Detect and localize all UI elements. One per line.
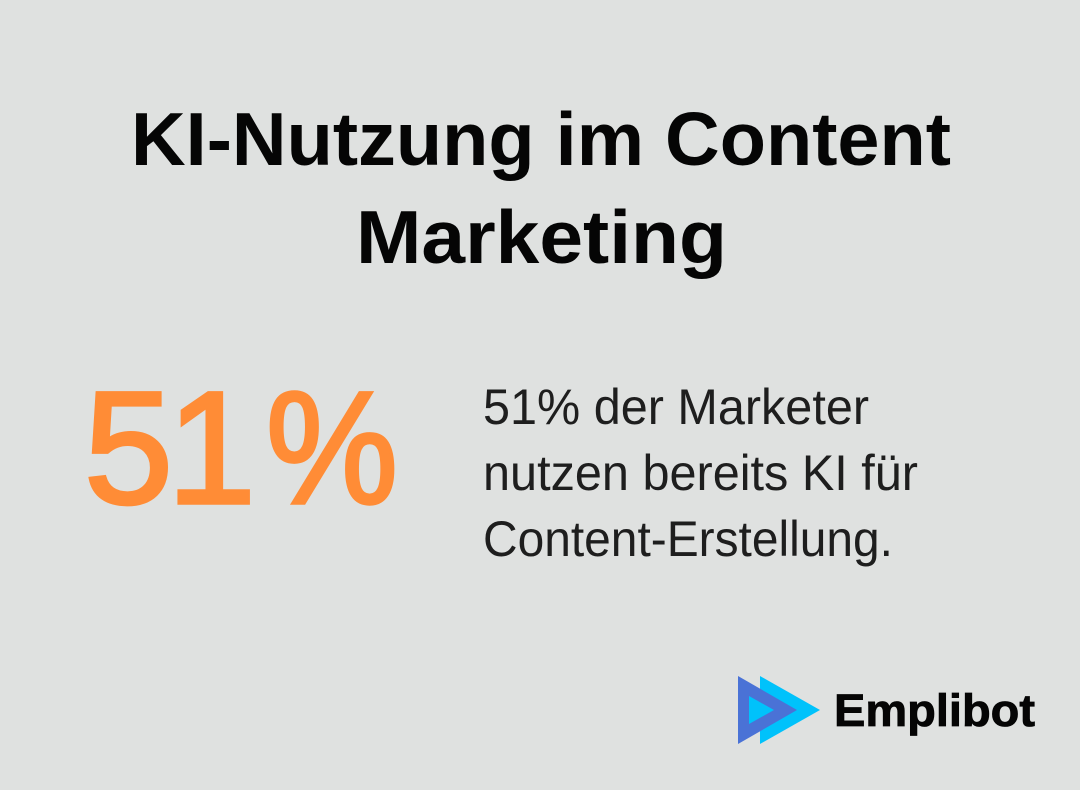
big statistic: 51%: 51 — [84, 358, 256, 537]
logo: Emplibot — [738, 676, 1035, 744]
icon: play triangles — [738, 676, 820, 744]
title — [131, 97, 951, 279]
statistic description: nutzen bereits KI für — [483, 445, 918, 501]
statistic description — [483, 379, 918, 567]
statistic description: 51% der Marketer — [483, 379, 869, 435]
statistic description: Content-Erstellung. — [483, 511, 893, 567]
title: Marketing — [356, 195, 727, 279]
big statistic: 51% — [84, 358, 398, 537]
title: KI-Nutzung im Content — [131, 97, 951, 181]
big statistic: 51%: % — [266, 358, 398, 537]
logo wordmark: Emplibot — [834, 685, 1035, 736]
